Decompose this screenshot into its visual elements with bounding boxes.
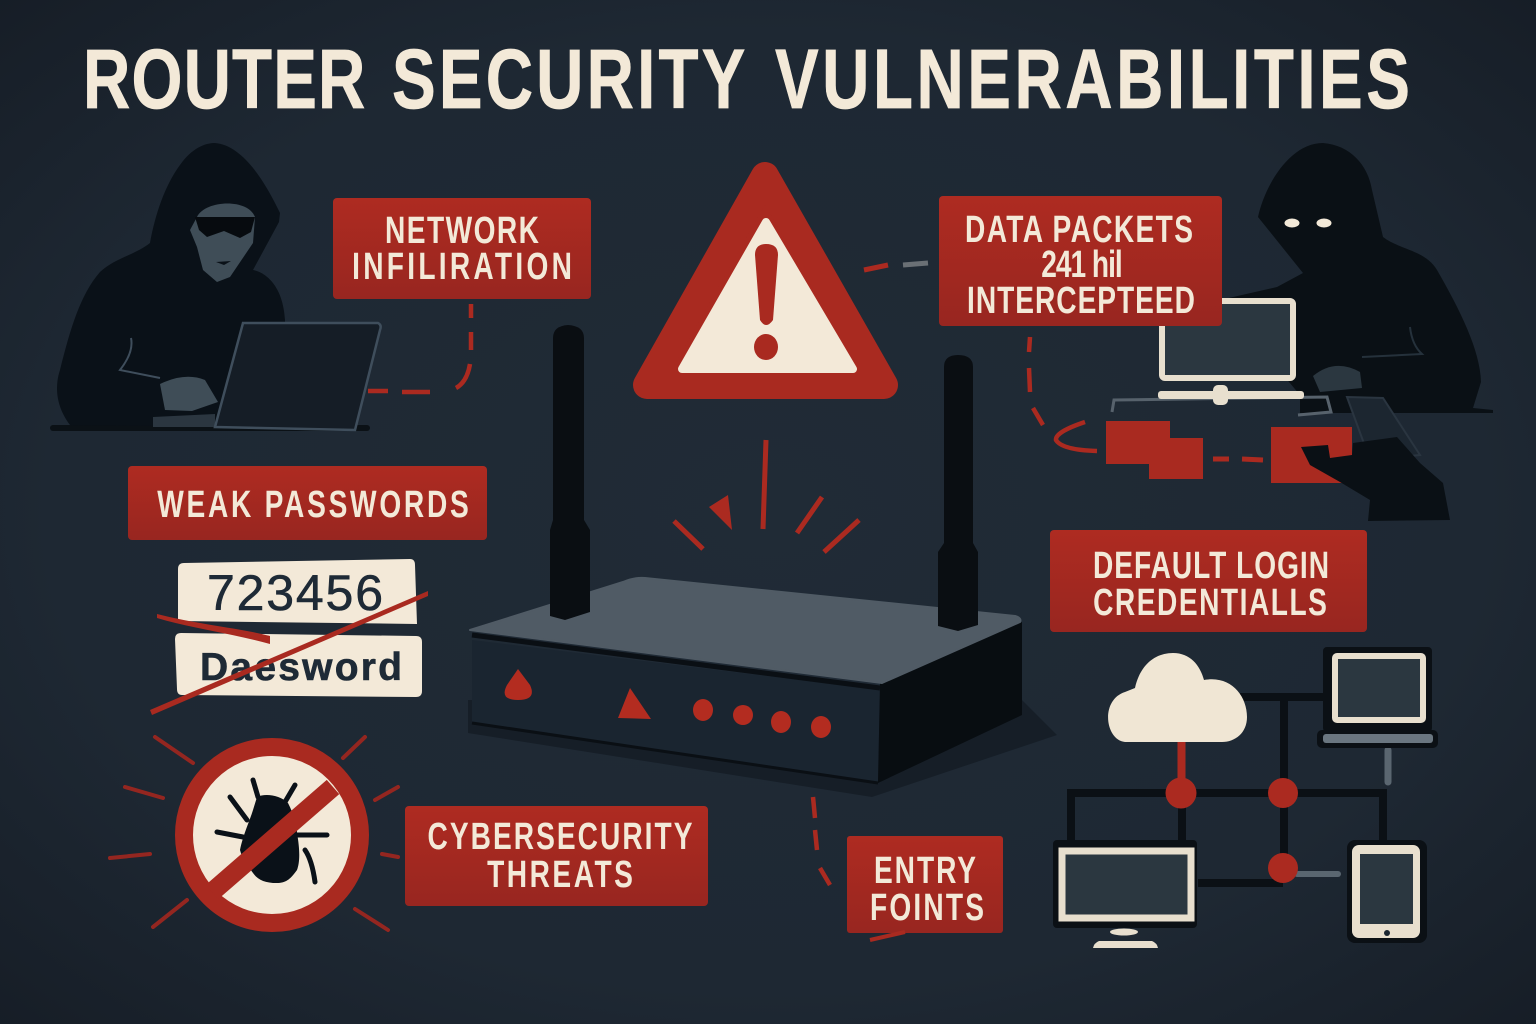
router lights bbox=[505, 669, 831, 738]
label: cybersecurity threats: CYBERSECURITY bbox=[428, 816, 692, 858]
label: network infiltration: NETWORK bbox=[385, 210, 539, 252]
tablet bbox=[1347, 840, 1427, 943]
label: data packets bbox=[939, 196, 1222, 326]
label: data packets: INTERCEPTEED bbox=[967, 280, 1195, 322]
connector: warning to data packets bbox=[864, 263, 928, 270]
warning triangle bbox=[647, 176, 884, 385]
connector: router to entry points bbox=[813, 797, 830, 885]
label: weak passwords: WEAK PASSWORDS bbox=[157, 484, 469, 526]
no bug icon bbox=[110, 737, 398, 930]
title: ROUTER bbox=[83, 32, 365, 126]
monitor bbox=[1053, 840, 1197, 948]
label: cybersecurity threats: THREATS bbox=[487, 854, 633, 896]
antenna left bbox=[550, 325, 590, 620]
label: entry points bbox=[847, 836, 1003, 940]
label: data packets: 241 hil bbox=[1041, 244, 1123, 286]
title: SECURITY bbox=[392, 32, 745, 126]
title bbox=[83, 32, 1410, 126]
crossed passwords bbox=[150, 559, 428, 715]
antenna right bbox=[938, 355, 978, 631]
label: entry points: ENTRY bbox=[874, 850, 976, 892]
label: default login credentials bbox=[1050, 530, 1367, 632]
label: network infiltration bbox=[333, 198, 591, 299]
label: cybersecurity threats bbox=[405, 806, 708, 906]
crossed passwords: 723456 bbox=[207, 565, 383, 621]
laptop bbox=[1317, 647, 1438, 748]
hacker right bbox=[1112, 143, 1493, 460]
title: VULNERABILITIES bbox=[775, 32, 1410, 126]
connector: data packets dashed line bbox=[1029, 337, 1043, 425]
hacker left bbox=[50, 143, 381, 431]
router bbox=[468, 325, 1057, 797]
alert signal lines bbox=[674, 440, 859, 552]
label: weak passwords bbox=[128, 466, 487, 540]
intercepted packets bbox=[1056, 421, 1450, 521]
label: default login credentials: CREDENTIALLS bbox=[1093, 582, 1327, 624]
label: data packets: DATA PACKETS bbox=[965, 209, 1193, 251]
cloud bbox=[1108, 653, 1247, 742]
connector: network infiltration to laptop bbox=[368, 304, 471, 392]
label: network infiltration: INFILIRATION bbox=[352, 246, 572, 288]
crossed passwords: Daesword bbox=[200, 646, 402, 689]
label: entry points: FOINTS bbox=[870, 887, 984, 929]
label: default login credentials: DEFAULT LOGIN bbox=[1093, 545, 1329, 587]
network diagram bbox=[1053, 647, 1438, 948]
